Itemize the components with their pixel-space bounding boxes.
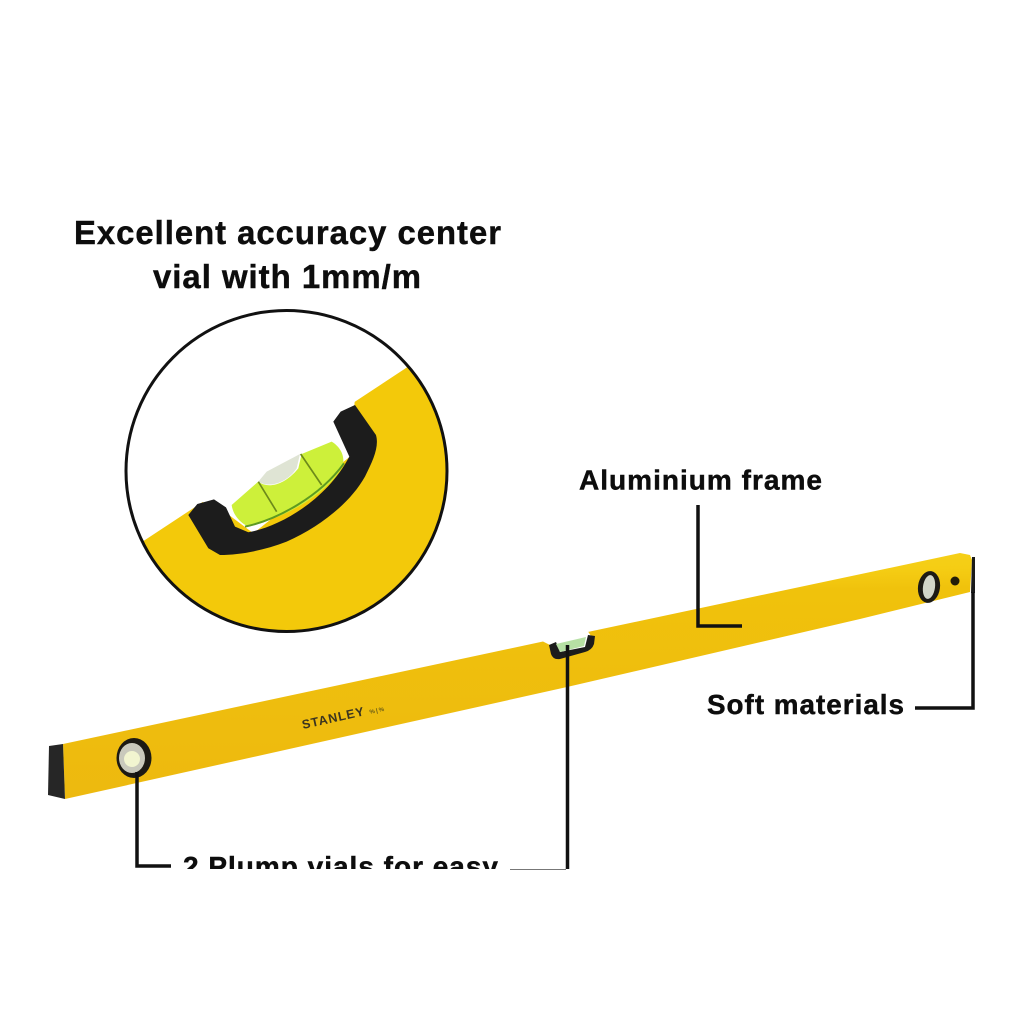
white glass window xyxy=(195,398,355,533)
callout circle: magnified center vial xyxy=(120,310,460,640)
label: aluminium frame: Aluminium frame xyxy=(579,464,823,496)
heading: center vial accuracy xyxy=(74,214,502,295)
end vial left xyxy=(116,738,152,778)
leader: soft materials xyxy=(915,592,973,708)
end cap right xyxy=(971,557,975,593)
bar body xyxy=(63,553,972,799)
infographic: spirit level features xyxy=(48,220,975,870)
center vial xyxy=(540,630,595,659)
end vial right xyxy=(916,570,942,604)
yellow level body in magnifier xyxy=(144,367,446,630)
circle outline xyxy=(126,310,447,632)
heading: center vial accuracy: vial with 1mm/m xyxy=(153,258,422,295)
leader: thin base line xyxy=(510,868,566,870)
end cap left xyxy=(48,744,65,799)
brand text: % | % xyxy=(369,707,385,716)
spirit level bar xyxy=(48,553,975,799)
magnified vial xyxy=(188,398,377,555)
brand text: STANLEY xyxy=(301,704,366,732)
leader: aluminium frame xyxy=(698,505,742,626)
hanging hole xyxy=(950,576,960,586)
leader: left plumb vial xyxy=(137,772,171,866)
heading: center vial accuracy: Excellent accuracy center xyxy=(74,214,502,251)
leader: center vial xyxy=(566,645,569,869)
label: plumb vials (cropped): 2 Plump vials for easy xyxy=(183,851,499,882)
label: soft materials: Soft materials xyxy=(707,689,905,720)
